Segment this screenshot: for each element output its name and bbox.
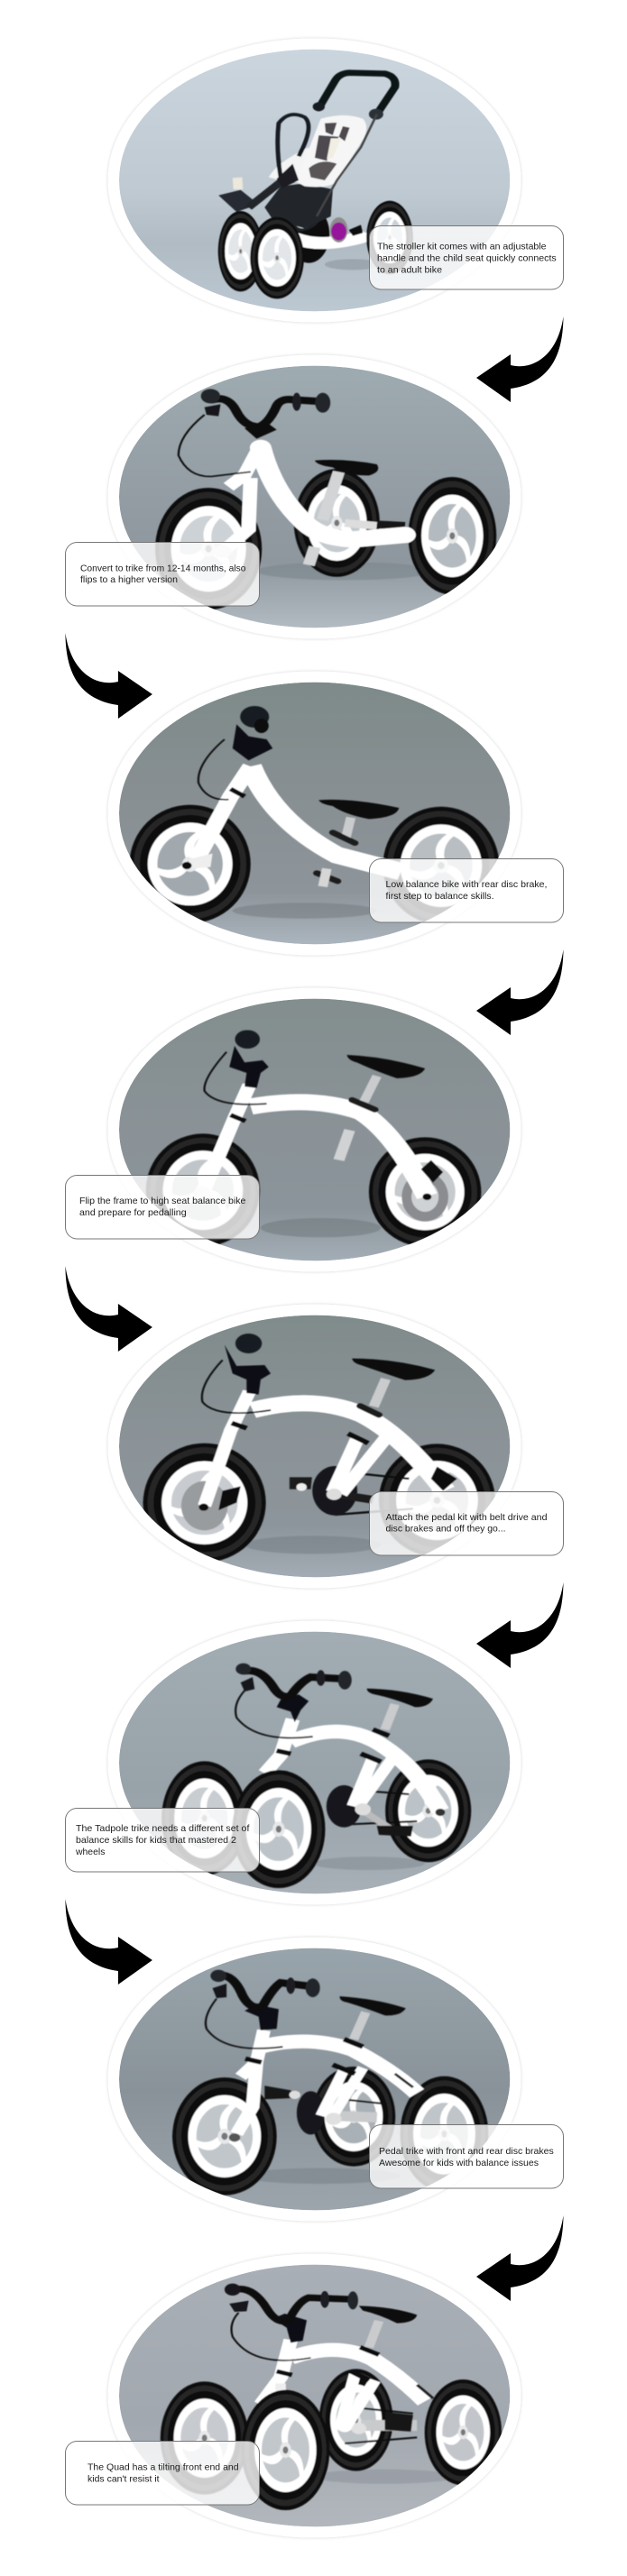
callout: The stroller kit comes with an adjustable — [377, 242, 547, 252]
arrow 1 — [476, 316, 563, 402]
callout: Awesome for kids with balance issues — [379, 2158, 539, 2168]
callout: Low balance bike with rear disc brake, — [386, 879, 547, 890]
callout: kids can't resist it — [88, 2474, 160, 2485]
callout — [65, 543, 260, 606]
panel: trike 12-14 months — [65, 355, 521, 638]
panel: quad — [65, 2254, 521, 2537]
callout: disc brakes and off they go... — [386, 1524, 505, 1535]
photo: stroller — [119, 50, 510, 311]
callout — [370, 1491, 563, 1555]
arrow 2 — [65, 633, 152, 719]
callout: wheels — [75, 1847, 105, 1857]
photo frame — [108, 2254, 521, 2537]
photo frame — [108, 355, 521, 638]
panel: stroller kit — [108, 38, 563, 323]
callout: The Tadpole trike needs a different set of — [76, 1823, 249, 1834]
photo frame — [108, 1304, 521, 1589]
callout: flips to a higher version — [80, 574, 178, 585]
photo frame — [108, 671, 521, 956]
callout: to an adult bike — [377, 265, 442, 276]
callout: Convert to trike from 12-14 months, also — [80, 563, 246, 573]
callout — [370, 2124, 563, 2188]
callout: Flip the frame to high seat balance bike — [79, 1196, 246, 1206]
callout — [65, 1176, 260, 1239]
callout: first step to balance skills. — [386, 891, 494, 902]
photo: balance bike — [119, 683, 510, 944]
photo frame — [108, 38, 521, 323]
callout: balance skills for kids that mastered 2 — [76, 1835, 236, 1846]
arrow 5 — [476, 1582, 563, 1668]
panel: tadpole trike — [65, 1621, 521, 1904]
callout: The Quad has a tilting front end and — [88, 2461, 239, 2472]
callout — [370, 858, 563, 922]
callout: and prepare for pedalling — [79, 1207, 187, 1218]
panel: high seat balance bike — [65, 988, 521, 1271]
callout: handle and the child seat quickly connects — [377, 252, 557, 263]
callout: Pedal trike with front and rear disc brakes — [379, 2146, 554, 2157]
arrow 7 — [476, 2215, 563, 2301]
photo: trike — [119, 366, 510, 628]
callout — [65, 2442, 260, 2505]
photo frame — [108, 988, 521, 1271]
photo: tadpole trike — [119, 1632, 510, 1893]
photo frame — [108, 1937, 521, 2222]
arrow 3 — [476, 949, 563, 1035]
photo: pedal bike — [119, 1316, 510, 1577]
callout — [370, 225, 563, 289]
photo: high seat bike — [119, 999, 510, 1260]
panel: pedal kit — [108, 1304, 563, 1589]
callout: Attach the pedal kit with belt drive and — [386, 1512, 548, 1523]
callout — [65, 1809, 260, 1872]
arrow 6 — [65, 1899, 152, 1985]
photo frame — [108, 1621, 521, 1904]
arrow 4 — [65, 1266, 152, 1352]
panel: low balance bike — [108, 671, 563, 956]
panel: pedal trike — [108, 1937, 563, 2222]
photo: quad — [119, 2265, 510, 2526]
photo: pedal trike — [119, 1948, 510, 2210]
